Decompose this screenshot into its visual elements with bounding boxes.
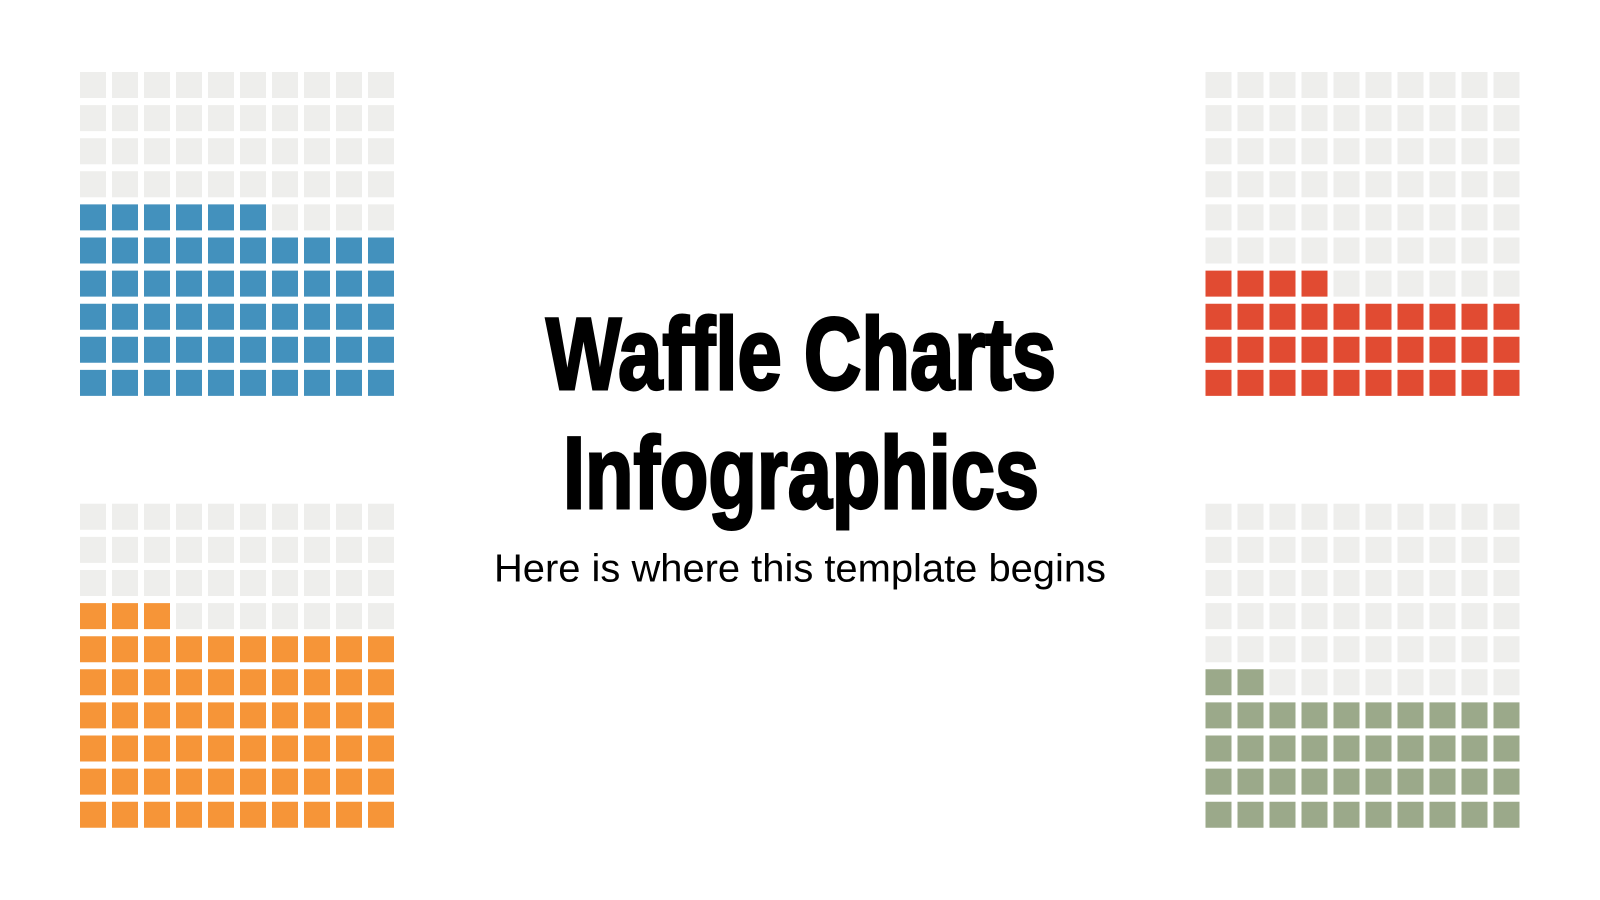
- title: Waffle Charts: [546, 297, 1056, 411]
- filled cells: blue: [80, 217, 394, 383]
- title: Infographics: [563, 416, 1039, 530]
- title: [546, 297, 1056, 530]
- filled cells: green: [1206, 682, 1520, 815]
- filled cells: orange: [80, 616, 394, 815]
- subtitle: Here is where this template begins: [494, 548, 1106, 590]
- empty cells: red chart: [1206, 85, 1520, 284]
- waffle chart: blue, top left: [80, 85, 394, 383]
- waffle chart: green, bottom right: [1206, 517, 1520, 815]
- waffle chart: orange, bottom left: [80, 517, 394, 815]
- empty cells: green chart: [1206, 517, 1520, 682]
- empty cells: blue chart: [80, 85, 394, 217]
- empty cells: orange chart: [80, 517, 394, 616]
- waffle chart: red, top right: [1206, 85, 1520, 383]
- filled cells: red: [1206, 284, 1520, 383]
